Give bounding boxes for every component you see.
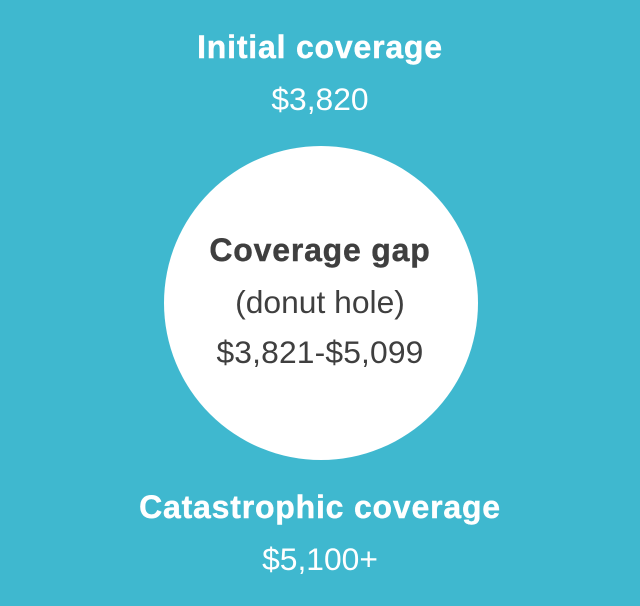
text: donut hole: (donut hole) — [235, 284, 405, 320]
value: coverage gap range: $3,821-$5,099 — [216, 334, 424, 370]
circle: coverage gap — [164, 146, 478, 460]
value: initial coverage amount: $3,820 — [271, 81, 369, 117]
heading: coverage gap: Coverage gap — [209, 232, 431, 268]
heading: initial coverage: Initial coverage — [197, 29, 443, 65]
heading: catastrophic coverage: Catastrophic coverage — [139, 489, 501, 525]
value: catastrophic coverage amount: $5,100+ — [262, 541, 378, 577]
